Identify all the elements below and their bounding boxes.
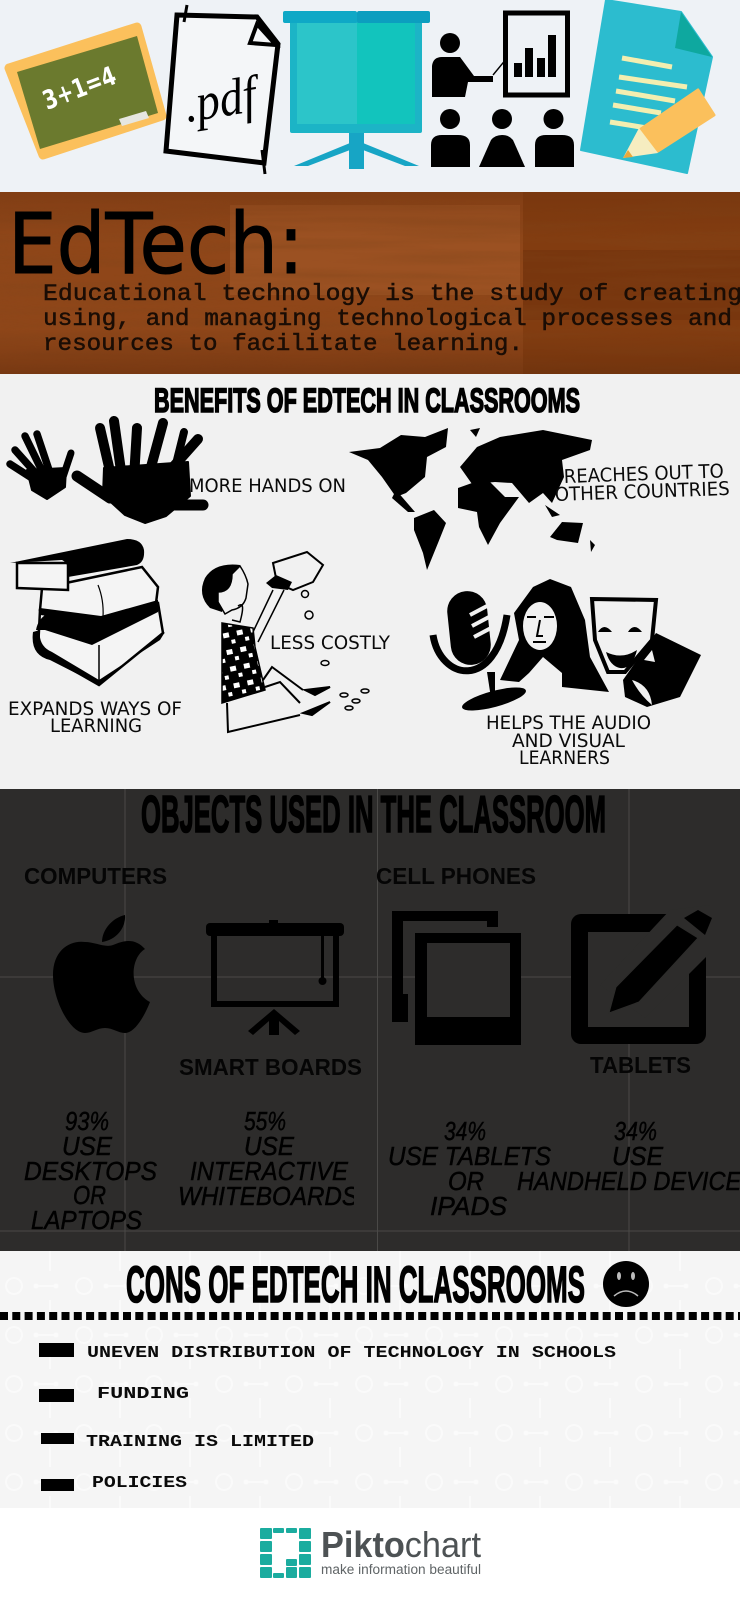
label: audio visual: HELPS THE AUDIO xyxy=(486,712,651,734)
icon: world map xyxy=(349,428,595,570)
label: reaches out xyxy=(554,460,730,506)
stat: 93 percent desktops: LAPTOPS xyxy=(31,1205,143,1235)
label: expands ways xyxy=(8,698,182,737)
icon: boy with piggy bank xyxy=(202,552,369,732)
icon: hands xyxy=(10,421,203,523)
panel: benefits xyxy=(0,374,740,789)
icon: tablet with pencil xyxy=(571,905,712,1044)
bullet list: cons items xyxy=(39,1343,616,1493)
label: smart boards: SMART BOARDS xyxy=(179,1054,362,1080)
stat: 34 percent handheld: USE xyxy=(612,1141,664,1171)
heading: EdTech: EdTech: xyxy=(8,195,304,293)
stat: 55 percent whiteboards: INTERACTIVE xyxy=(190,1156,349,1186)
label: expands ways: EXPANDS WAYS OF xyxy=(8,698,182,720)
icon: pdf document: .pdf xyxy=(180,65,266,134)
stat: 93 percent desktops: DESKTOPS xyxy=(24,1156,158,1186)
stat: 93 percent desktops: USE xyxy=(62,1131,113,1161)
panel: objects used in the classroom xyxy=(0,786,740,1251)
icon: projector screen xyxy=(283,11,430,169)
icon: projector board xyxy=(206,920,344,1035)
label: computers: COMPUTERS xyxy=(24,863,167,889)
label: audio visual: AND VISUAL xyxy=(512,730,625,752)
icon: microphone, mona lisa and masks xyxy=(433,579,701,715)
icon: apple xyxy=(53,915,150,1033)
panel: header icon strip xyxy=(0,0,740,192)
stat: 34 percent tablets: 34% xyxy=(444,1116,486,1146)
stat: 34 percent tablets: OR xyxy=(448,1166,484,1196)
label: cell phones: CELL PHONES xyxy=(376,863,536,889)
icon: stack of books xyxy=(10,539,165,685)
icon: presenter and audience xyxy=(431,13,574,167)
bullet list: cons items: TRAINING IS LIMITED xyxy=(86,1433,314,1452)
label: more hands on: MORE HANDS ON xyxy=(189,475,346,497)
bullet list: cons items: POLICIES xyxy=(92,1474,187,1493)
panel: footer xyxy=(0,1508,740,1600)
stat: 34 percent tablets: IPADS xyxy=(430,1191,508,1221)
logo: Piktochart: make information beautiful xyxy=(321,1562,481,1577)
label: tablets: TABLETS xyxy=(590,1052,691,1078)
stat: 55 percent whiteboards: WHITEBOARDS xyxy=(178,1181,359,1211)
logo: Piktochart xyxy=(260,1524,481,1578)
icon: sad face xyxy=(603,1261,649,1307)
label: reaches out: REACHES OUT TO xyxy=(563,460,724,488)
stat: 93 percent desktops: 93% xyxy=(65,1106,109,1136)
stat: 34 percent tablets: USE TABLETS xyxy=(388,1141,552,1171)
label: expands ways: LEARNING xyxy=(50,715,142,737)
panel: cons xyxy=(0,1251,740,1508)
text block: definition: using, and managing technological processes and xyxy=(43,306,732,333)
logo: Piktochart: Piktochart xyxy=(321,1524,481,1565)
bullet list: cons items: FUNDING xyxy=(97,1385,189,1404)
stat: 55 percent whiteboards xyxy=(180,1112,354,1206)
panel: wood definition band xyxy=(0,192,740,374)
bullet list: cons items: UNEVEN DISTRIBUTION OF TECHNOLOGY IN SCHOOLS xyxy=(87,1344,616,1363)
icon: chalkboard xyxy=(9,27,162,155)
stat: 93 percent desktops: OR xyxy=(73,1180,106,1210)
text block: definition xyxy=(43,281,740,358)
stat: 93 percent desktops xyxy=(24,1106,158,1235)
stat: 55 percent whiteboards: USE xyxy=(244,1131,295,1161)
text block: definition: resources to facilitate learning. xyxy=(43,331,523,358)
label: less costly: LESS COSTLY xyxy=(270,632,390,654)
icon: chalkboard: 3+1=4 xyxy=(39,61,120,117)
label: audio visual: LEARNERS xyxy=(519,747,610,769)
stat: 34 percent handheld xyxy=(517,1116,740,1196)
text block: definition: Educational technology is the study of creating, xyxy=(43,281,740,308)
stat: 34 percent tablets xyxy=(388,1116,552,1221)
icon: copies xyxy=(392,911,521,1045)
label: audio visual xyxy=(486,712,651,769)
icon: document with pencil xyxy=(581,0,714,173)
label: reaches out: OTHER COUNTRIES xyxy=(554,478,730,506)
stat: 34 percent handheld: 34% xyxy=(614,1116,657,1146)
stat: 55 percent whiteboards: 55% xyxy=(244,1106,286,1136)
icon: pdf document xyxy=(166,5,278,174)
